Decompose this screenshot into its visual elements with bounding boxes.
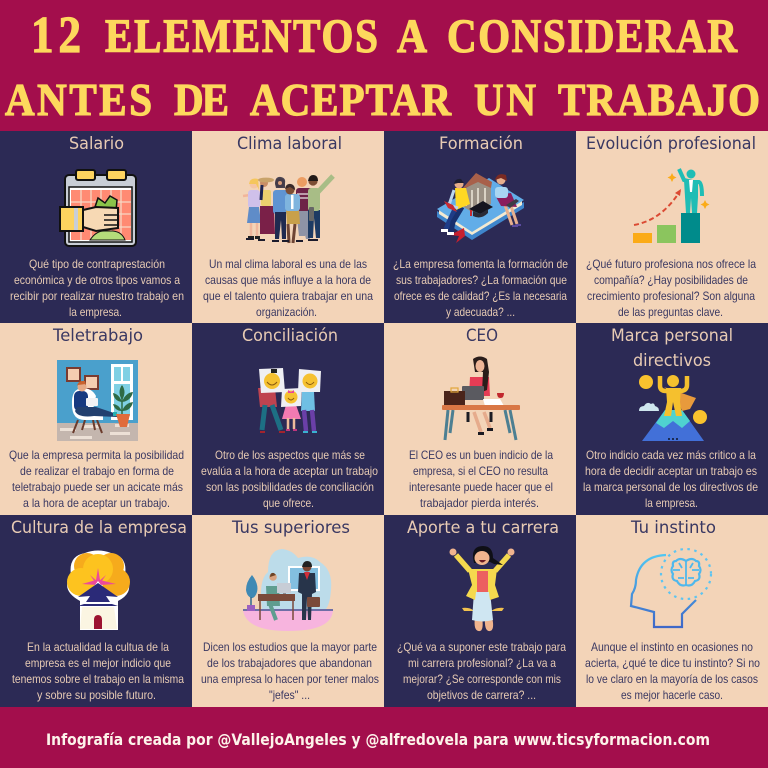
body text: Conciliación: que ofrece. xyxy=(263,496,314,510)
body text: Formación xyxy=(393,257,568,319)
icon: career growth bars xyxy=(633,169,710,243)
heading: Marca personal directivos xyxy=(611,326,733,370)
body text: Cultura de la empresa: tenemos sobre el trabajo en la misma xyxy=(12,672,184,686)
panel: Clima laboral xyxy=(192,131,384,323)
body text: Salario: la empresa. xyxy=(69,305,122,319)
body text: Tus superiores: una empresa lo hacen por tener malos xyxy=(201,672,379,686)
body text: Teletrabajo xyxy=(9,448,184,510)
body text: Conciliación: Otro de los aspectos que más se xyxy=(215,448,365,462)
heading: Salario: Salario xyxy=(69,134,124,153)
body text: Teletrabajo: teletrabajo puede ser un acicate más xyxy=(12,480,183,494)
body text: Clima laboral: organización. xyxy=(256,305,317,319)
body text: CEO: empresa, si el CEO no resulta xyxy=(413,464,548,478)
body text: CEO: trabajador pierda interés. xyxy=(420,496,539,510)
body text: Aporte a tu carrera: mi carrera profesional? ¿La va a xyxy=(408,656,556,670)
panel: CEO xyxy=(384,323,576,515)
body text: Tus superiores: Dicen los estudios que la mayor parte xyxy=(203,640,377,654)
body text: Cultura de la empresa: empresa es el mejor indicio que xyxy=(25,656,171,670)
heading: Formación: Formación xyxy=(439,134,523,153)
title: ACEPTAR xyxy=(250,75,452,126)
icon: person working from home xyxy=(57,360,138,441)
body text: Aporte a tu carrera: ¿Qué va a suponer este trabajo para xyxy=(397,640,566,654)
heading: Marca personal directivos: Marca personal xyxy=(611,326,733,345)
panel: Cultura de la empresa xyxy=(0,515,192,707)
title: ANTES xyxy=(5,75,152,126)
body text: Marca personal directivos: la empresa. xyxy=(645,496,698,510)
body text: Clima laboral: causas que más influye a la hora de xyxy=(205,273,371,287)
body text: Aporte a tu carrera: objetivos de carrera? ... xyxy=(427,688,536,702)
heading: Marca personal directivos: directivos xyxy=(633,351,711,370)
heading: Conciliación: Conciliación xyxy=(242,326,338,345)
body text: Conciliación: evalúa a la hora de aceptar un trabajo xyxy=(201,464,378,478)
body text: Aporte a tu carrera xyxy=(397,640,566,702)
title: CONSIDERAR xyxy=(447,9,738,63)
heading: Evolución profesional: Evolución profesional xyxy=(586,134,756,153)
body text: Evolución profesional: de las preguntas clave. xyxy=(618,305,723,319)
body text: Marca personal directivos xyxy=(583,448,758,510)
body text: Evolución profesional xyxy=(586,257,756,319)
body text: Cultura de la empresa xyxy=(12,640,184,702)
heading: Cultura de la empresa: Cultura de la empresa xyxy=(11,518,187,537)
body text: Formación: sus trabajadores? ¿La formación que xyxy=(396,273,567,287)
panel: Conciliación xyxy=(192,323,384,515)
panel: Tus superiores xyxy=(192,515,384,707)
icon: group of colleagues xyxy=(243,175,333,243)
heading: CEO: CEO xyxy=(466,326,498,345)
title xyxy=(5,7,760,126)
body text: Salario: económica y de otros tipos vamos a xyxy=(14,273,180,287)
icon: students on a book xyxy=(437,173,524,243)
title: TRABAJO xyxy=(558,75,760,126)
panel: Salario xyxy=(0,131,192,323)
title: A xyxy=(397,9,427,63)
icon: woman jumping for joy xyxy=(450,546,514,631)
body text: CEO: El CEO es un buen indicio de la xyxy=(409,448,553,462)
body text: CEO: interesante puede hacer que el xyxy=(409,480,553,494)
body text: Conciliación xyxy=(201,448,378,510)
body text: Tus superiores xyxy=(201,640,379,702)
title: ELEMENTOS xyxy=(105,9,378,63)
body text: Teletrabajo: de realizar el trabajo en forma de xyxy=(20,464,174,478)
icon: head with brain xyxy=(631,549,711,627)
title: 12 xyxy=(31,7,81,64)
body text: Tus superiores: "jefes" ... xyxy=(269,688,310,702)
body text: Formación: ¿La empresa fomenta la formación de xyxy=(393,257,568,271)
body text: Salario xyxy=(10,257,184,319)
body text: Conciliación: son las posibilidades de conciliación xyxy=(206,480,374,494)
body text: Salario: Qué tipo de contraprestación xyxy=(29,257,165,271)
icon: family holding smiley signs xyxy=(258,368,321,433)
body text: Cultura de la empresa: y sobre su posible futuro. xyxy=(37,688,156,702)
body text: Formación: y adecuada? ... xyxy=(446,305,515,319)
body text: Teletrabajo: Que la empresa permita la posibilidad xyxy=(9,448,184,462)
heading: Tus superiores: Tus superiores xyxy=(231,518,350,537)
panel: Aporte a tu carrera xyxy=(384,515,576,707)
panel: Marca personal directivos xyxy=(576,323,768,515)
body text: Formación: ofrece es de calidad? ¿Es la necesaria xyxy=(394,289,567,303)
body text: Clima laboral xyxy=(203,257,373,319)
heading: Tu instinto: Tu instinto xyxy=(630,518,716,537)
icon: CEO woman at desk xyxy=(442,356,520,440)
heading: Aporte a tu carrera: Aporte a tu carrera xyxy=(407,518,559,537)
body text: Cultura de la empresa: En la actualidad la cultua de la xyxy=(27,640,169,654)
body text: Salario: recibir por realizar nuestro trabajo en xyxy=(10,289,184,303)
body text: Teletrabajo: a la hora de aceptar un trabajo. xyxy=(23,496,170,510)
icon: temple and golden tree xyxy=(67,550,130,630)
body text: CEO xyxy=(409,448,553,510)
panel: Teletrabajo xyxy=(0,323,192,515)
icon: employee and boss in office xyxy=(243,549,333,631)
panel: Tu instinto xyxy=(576,515,768,707)
title: UN xyxy=(474,75,536,126)
panel: Evolución profesional xyxy=(576,131,768,323)
body text: Clima laboral: Un mal clima laboral es una de las xyxy=(209,257,367,271)
title: DE xyxy=(174,75,229,126)
body text: Tu instinto xyxy=(585,640,760,702)
body text: Tu instinto: es mejor hacerle caso. xyxy=(621,688,723,702)
heading: Teletrabajo: Teletrabajo xyxy=(52,326,143,345)
body text: Aporte a tu carrera: mejorar? ¿Se corresponde con mis xyxy=(403,672,561,686)
panel: Formación xyxy=(384,131,576,323)
body text: Tus superiores: de los trabajadores que abandonan xyxy=(207,656,372,670)
body text: Clima laboral: que el talento quiera trabajar en una xyxy=(203,289,373,303)
icon: personal brand figure on mountain xyxy=(639,375,707,441)
icon: salary calendar with hand and money xyxy=(60,170,136,246)
heading: Clima laboral: Clima laboral xyxy=(237,134,342,153)
